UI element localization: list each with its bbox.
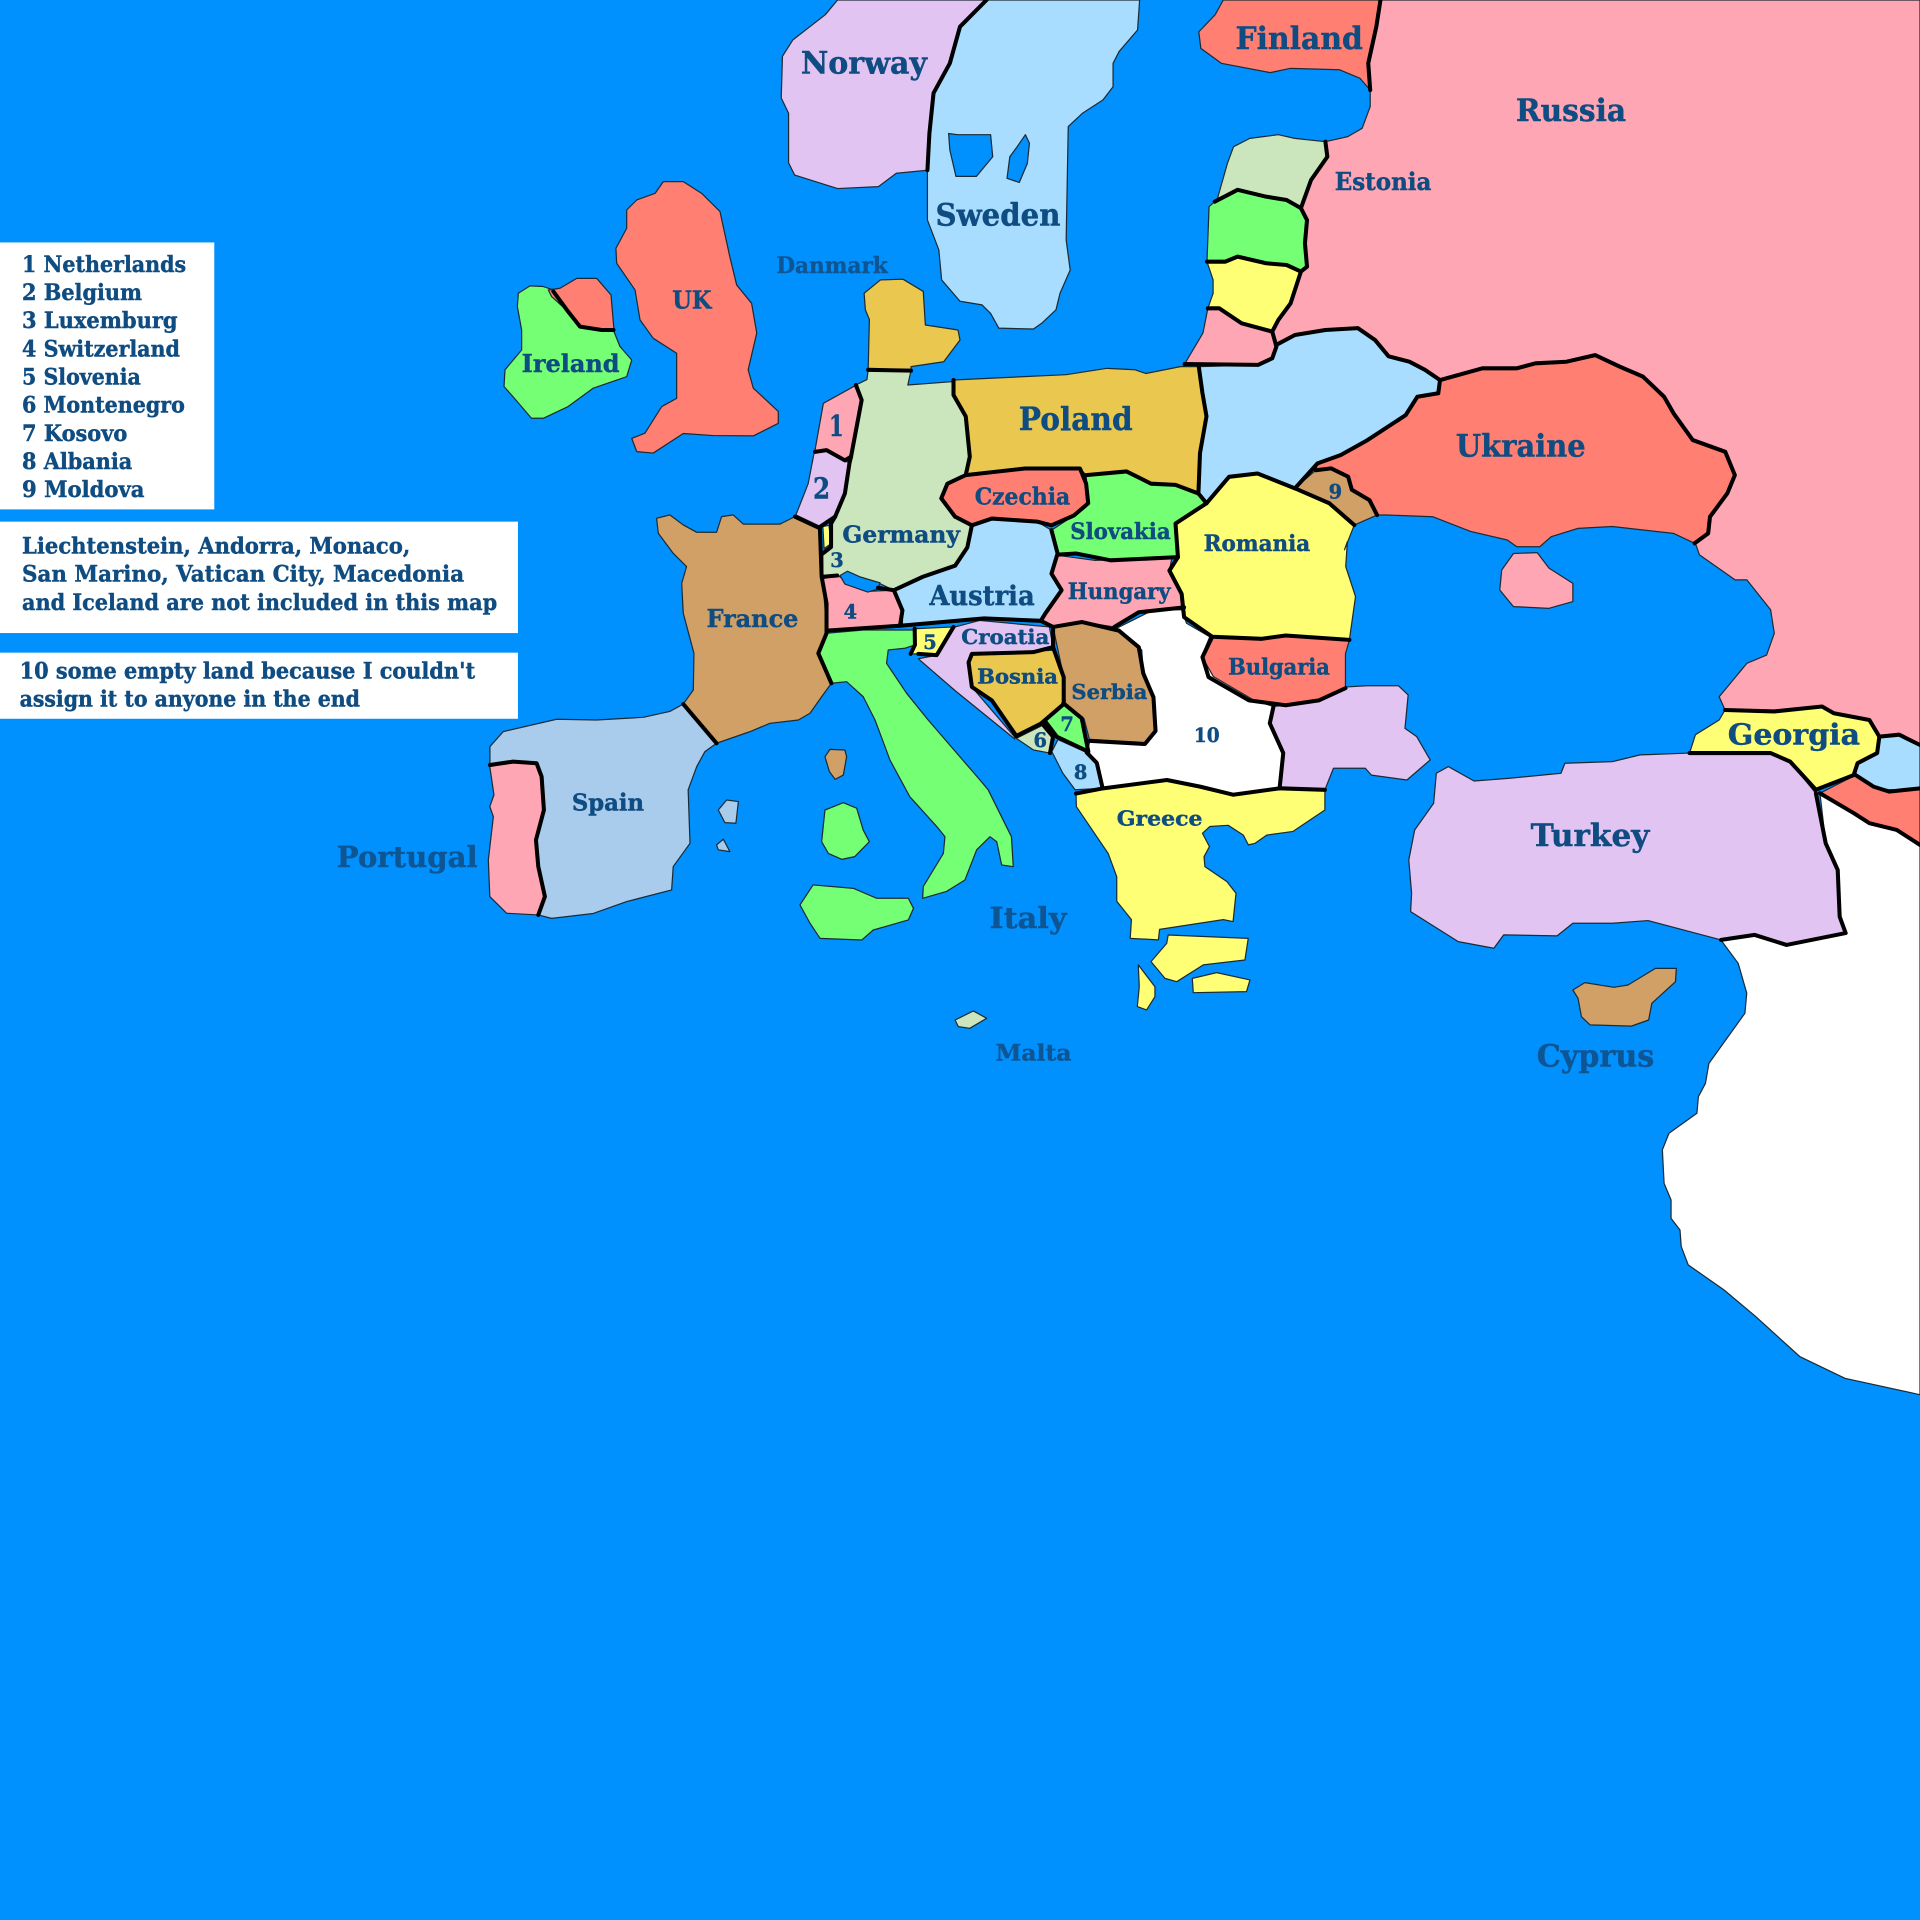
Romania	[1169, 474, 1356, 640]
legend entries: 5 Slovenia	[22, 364, 141, 390]
Sweden	[927, 0, 1140, 329]
country labels on land: 3	[830, 549, 844, 572]
country labels on land: Bulgaria	[1228, 655, 1330, 681]
Spain	[490, 704, 717, 918]
Bulgaria	[1202, 636, 1349, 705]
legend: numbered countries	[0, 242, 214, 509]
Swedish lakes	[949, 133, 1029, 182]
Bosnia	[969, 650, 1064, 736]
Azerbaijan	[1856, 735, 1920, 790]
France	[657, 515, 831, 743]
note: excluded countries: and Iceland are not included in this map	[22, 590, 497, 616]
country labels on land: Greece	[1117, 805, 1202, 830]
country labels on land: Bosnia	[977, 663, 1058, 688]
Belarus	[1198, 328, 1440, 503]
Hungary	[1041, 555, 1184, 627]
Norway	[781, 0, 987, 189]
Russia	[1272, 0, 1920, 744]
country labels on land: 4	[844, 600, 857, 623]
Corsica	[825, 749, 847, 779]
Sardinia	[822, 803, 869, 859]
country labels on land: Czechia	[975, 483, 1070, 510]
note: excluded countries	[0, 522, 518, 633]
Malta	[955, 1011, 987, 1028]
note: empty land: assign it to anyone in the end	[20, 687, 360, 713]
UK	[616, 182, 778, 453]
Crimea	[1500, 553, 1573, 608]
country labels on land: 7	[1060, 713, 1074, 736]
country labels on land: Sweden	[936, 197, 1060, 233]
Austria	[894, 519, 1062, 626]
country labels on sea: Danmark	[776, 253, 888, 279]
country labels on land: France	[707, 604, 798, 633]
country labels on land: Ukraine	[1456, 429, 1586, 465]
Kosovo	[1045, 703, 1088, 752]
Lithuania	[1207, 257, 1301, 332]
Middle East	[1662, 793, 1920, 1395]
country labels on land: Croatia	[961, 624, 1049, 649]
legend entries: 1 Netherlands	[22, 252, 186, 278]
legend entries: 2 Belgium	[22, 280, 142, 306]
legend entries: 9 Moldova	[22, 477, 144, 503]
country labels on land: Estonia	[1335, 167, 1432, 196]
Moldova	[1295, 468, 1377, 525]
Lake Constance	[840, 571, 880, 592]
country labels on sea: Portugal	[337, 839, 478, 874]
country labels on land: 6	[1033, 729, 1047, 752]
country labels on land: 9	[1329, 480, 1342, 503]
Crete and islands	[1137, 935, 1250, 1010]
Croatia	[918, 620, 1053, 739]
country labels on land: Romania	[1204, 531, 1310, 557]
note: excluded countries: San Marino, Vatican City, Macedonia	[22, 562, 464, 588]
Estonia	[1215, 135, 1327, 208]
Portugal	[488, 762, 545, 915]
Sicily	[800, 885, 913, 940]
Georgia	[1690, 707, 1879, 790]
country labels on land: UK	[672, 286, 713, 315]
country labels on land: Russia	[1516, 93, 1626, 129]
Armenia	[1820, 775, 1920, 845]
Slovakia	[1051, 471, 1206, 560]
Latvia	[1207, 190, 1307, 272]
country labels on land: 2	[813, 470, 830, 505]
country labels on sea	[337, 253, 1654, 1075]
Netherlands	[815, 386, 862, 460]
country labels on sea: Cyprus	[1537, 1039, 1654, 1075]
Italy	[818, 630, 1013, 898]
Denmark	[864, 279, 960, 371]
legend entries: 8 Albania	[22, 449, 132, 475]
Poland	[954, 367, 1206, 493]
country labels on land: Turkey	[1531, 818, 1651, 854]
Finland	[1199, 0, 1380, 90]
country labels on land: Ireland	[522, 349, 620, 378]
legend entries: 7 Kosovo	[22, 421, 127, 447]
country labels on land: Poland	[1019, 400, 1133, 438]
Kaliningrad	[1185, 308, 1276, 365]
Albania	[1052, 740, 1103, 790]
Cyprus	[1573, 968, 1676, 1026]
Greece	[1076, 780, 1325, 940]
country labels on land: Norway	[801, 45, 928, 81]
country labels on land: Austria	[928, 581, 1035, 612]
note: empty land: 10 some empty land because I couldn't	[20, 658, 476, 684]
legend entries: 4 Switzerland	[22, 336, 180, 362]
country labels on land: Spain	[572, 790, 644, 817]
note: excluded countries: Liechtenstein, Andorra, Monaco,	[22, 533, 410, 559]
country labels on sea: Italy	[989, 900, 1067, 935]
country labels on land: Slovakia	[1070, 519, 1171, 545]
legend entries: 6 Montenegro	[22, 393, 185, 419]
Luxembourg	[823, 525, 831, 549]
legend entries	[22, 252, 186, 503]
country labels on sea: Malta	[996, 1040, 1071, 1066]
Northern Ireland	[548, 278, 614, 330]
legend entries: 3 Luxemburg	[22, 308, 178, 334]
Montenegro	[1016, 725, 1053, 753]
note: empty land	[0, 653, 518, 719]
country labels on land: 1	[829, 408, 844, 443]
country labels on land: Finland	[1236, 21, 1363, 57]
Turkey	[1409, 753, 1846, 948]
country labels on land: 8	[1074, 761, 1087, 784]
European Turkey	[1270, 686, 1430, 790]
land borders	[490, 0, 1920, 945]
country labels on land: Germany	[842, 521, 961, 548]
country labels on land: 5	[923, 631, 937, 654]
Czechia	[941, 468, 1088, 525]
Switzerland	[823, 576, 902, 631]
country labels on land: 10	[1194, 724, 1220, 747]
Serbia	[1053, 622, 1156, 744]
Ukraine	[1316, 355, 1735, 547]
country labels on land	[522, 21, 1860, 854]
map: countries	[488, 0, 1920, 1395]
country labels on land: Hungary	[1068, 579, 1172, 605]
country labels on land: Serbia	[1071, 679, 1147, 704]
Slovenia	[911, 627, 954, 655]
Balearics	[717, 800, 738, 852]
country labels on land: Georgia	[1728, 716, 1860, 751]
Ireland	[504, 286, 632, 418]
Land 10	[1087, 610, 1283, 795]
Germany	[823, 370, 972, 590]
Belgium	[796, 450, 849, 527]
